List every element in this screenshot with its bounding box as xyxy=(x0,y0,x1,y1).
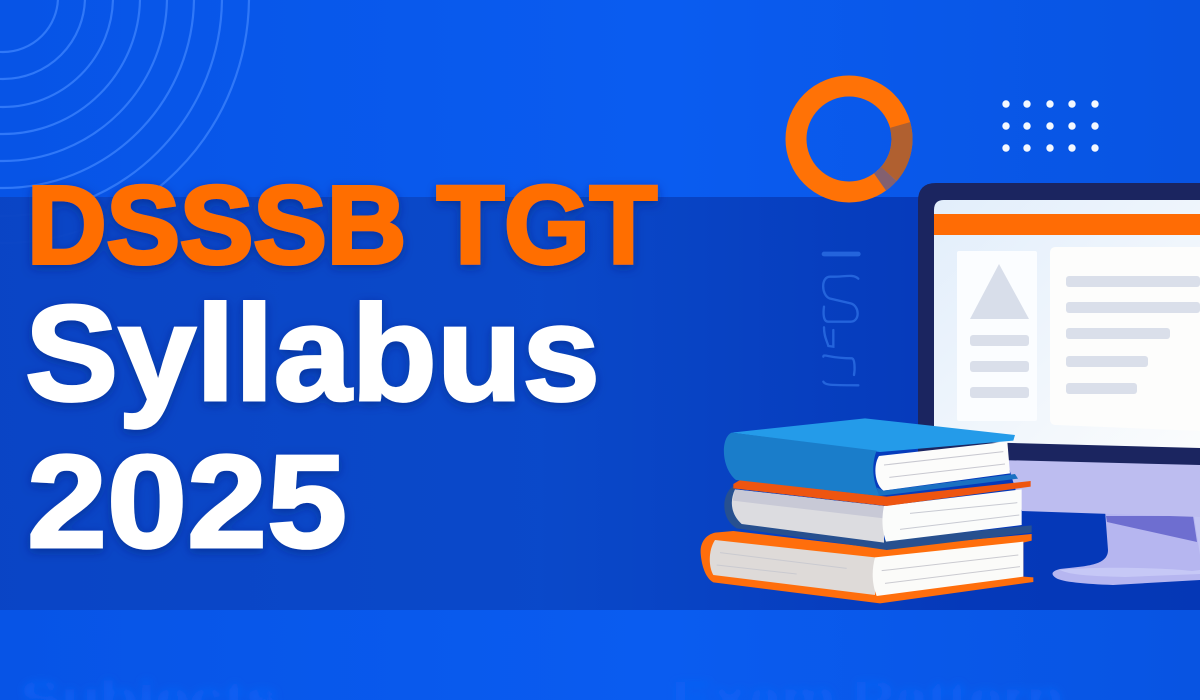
orange title bar xyxy=(934,214,1200,235)
stack of books xyxy=(701,418,1033,603)
monitor screen xyxy=(934,200,1200,448)
monitor frame xyxy=(918,183,1200,465)
title: 2025: 2025 xyxy=(27,428,347,575)
dot grid xyxy=(1002,100,1099,152)
decorative squiggle xyxy=(823,254,858,385)
top blue book xyxy=(724,418,1018,496)
darker central band xyxy=(0,197,1200,610)
middle book xyxy=(724,480,1032,550)
ring icon xyxy=(796,86,902,192)
title: DSSSB TGT: DSSSB TGT xyxy=(27,164,657,287)
monitor chin xyxy=(1005,455,1200,517)
left card xyxy=(957,251,1037,421)
concentric arcs xyxy=(0,0,249,243)
bottom orange book xyxy=(701,531,1033,603)
faint blurred footer labels xyxy=(20,672,1064,700)
monitor stand xyxy=(1053,510,1200,585)
title: Syllabus: Syllabus xyxy=(25,277,600,429)
monitor xyxy=(918,183,1200,585)
right card xyxy=(1050,247,1200,431)
